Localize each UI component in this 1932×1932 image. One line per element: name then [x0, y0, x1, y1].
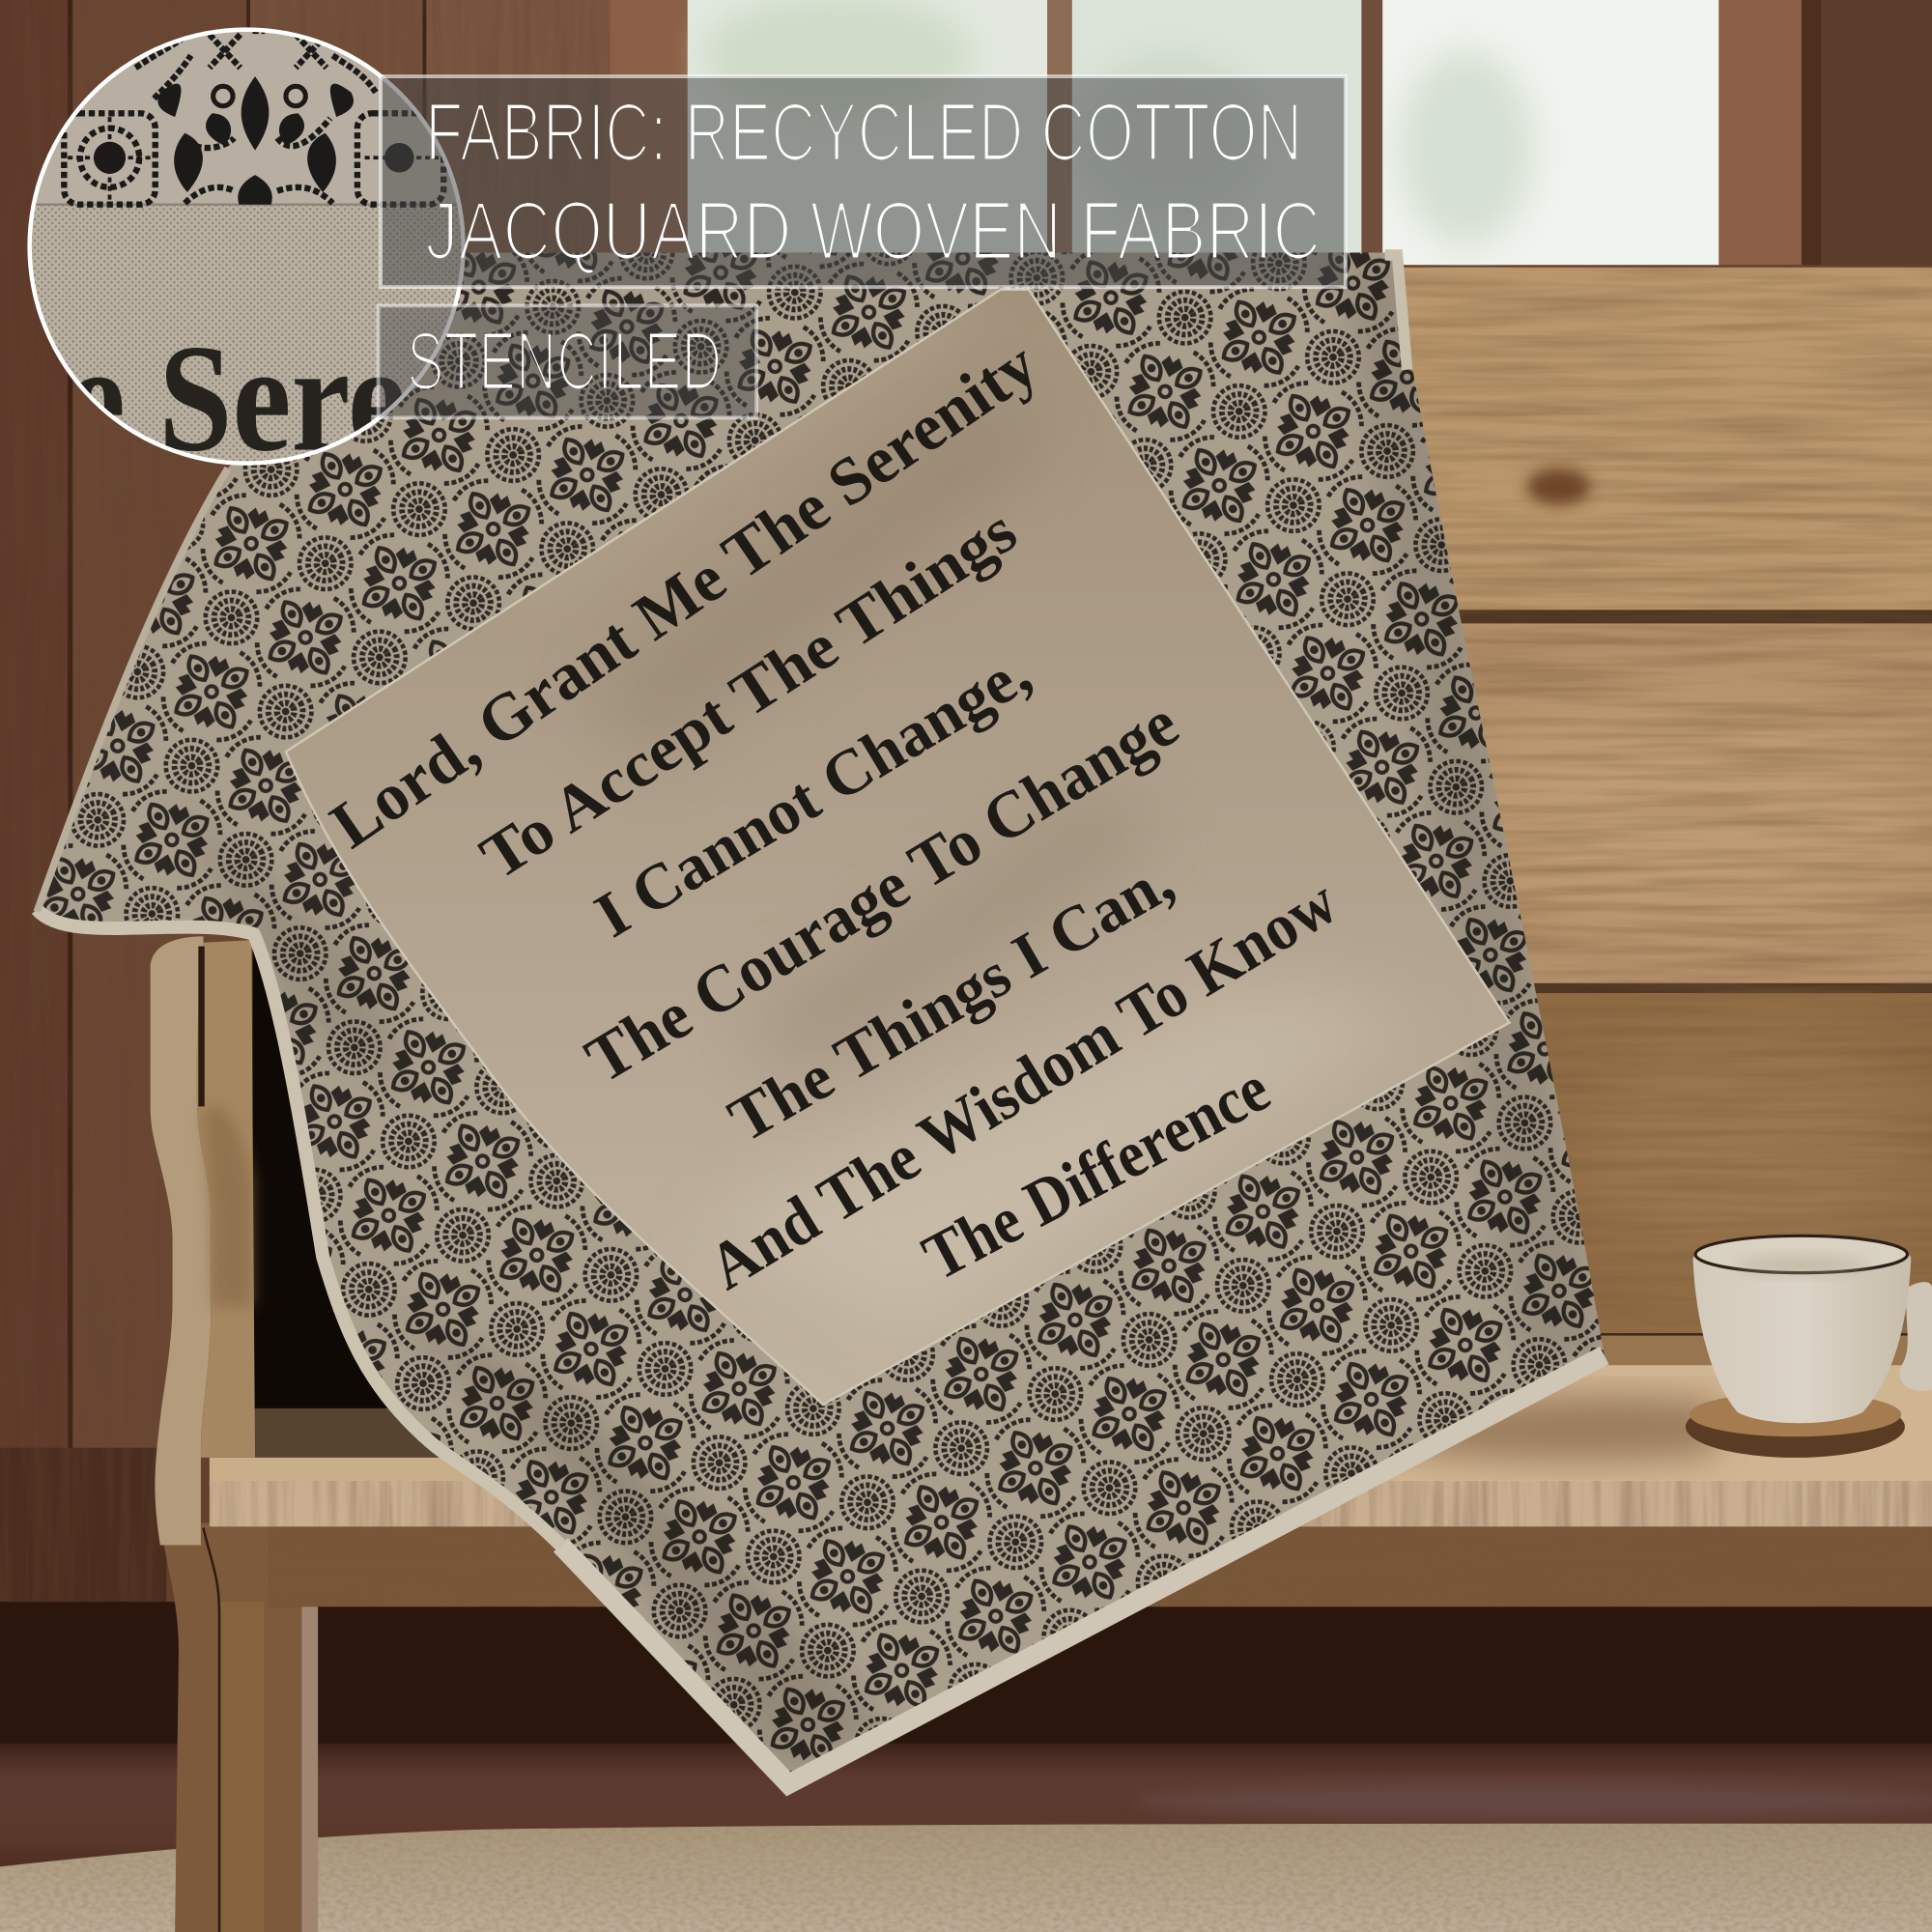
circle damask motifs: [64, 31, 443, 205]
circle stencil text: e Sere: [67, 314, 407, 484]
rug: [0, 1824, 1932, 1932]
bench arm: [151, 936, 255, 1545]
lower wall and floor: [0, 1602, 1932, 1879]
throw blanket: [0, 246, 1627, 1799]
verse panel: [286, 290, 1510, 1405]
verse text: I Cannot Change,: [583, 637, 1042, 952]
mug handle: [1900, 1282, 1932, 1391]
verse text: The Difference: [911, 1051, 1281, 1294]
label: fabric: [381, 76, 1346, 287]
bench frame: [160, 936, 1932, 1932]
label: fabric: JACQUARD WOVEN FABRIC: [425, 185, 1321, 277]
verse text: Lord, Grant Me The Serenity: [318, 327, 1050, 862]
blanket binding: [37, 909, 560, 1545]
panel folds: [609, 431, 1356, 1300]
bench leg: [160, 1523, 318, 1932]
verse text: The Courage To Change: [574, 686, 1190, 1096]
verse text: And The Wisdom To Know: [696, 865, 1350, 1304]
blanket patterned body: [37, 252, 1605, 1784]
arm outer piece: [151, 936, 211, 1545]
mug body: [1693, 1239, 1911, 1423]
label: fabric: FABRIC: RECYCLED COTTON: [425, 87, 1302, 179]
verse text: The Things I Can,: [718, 845, 1185, 1156]
blanket shading: [0, 246, 1627, 1799]
mug on coaster: [1686, 1236, 1932, 1458]
window: [610, 0, 1932, 265]
coaster: [1686, 1392, 1905, 1458]
bench back planks: [1386, 268, 1932, 1368]
arm inner piece: [197, 940, 255, 1458]
zoom detail circle: [25, 25, 469, 484]
mug rim: [1695, 1236, 1907, 1273]
label: stenciled: STENCILED: [407, 316, 722, 408]
label: stenciled: [379, 305, 756, 417]
verse text: To Accept The Things: [469, 496, 1029, 894]
verse text: [318, 327, 1350, 1304]
